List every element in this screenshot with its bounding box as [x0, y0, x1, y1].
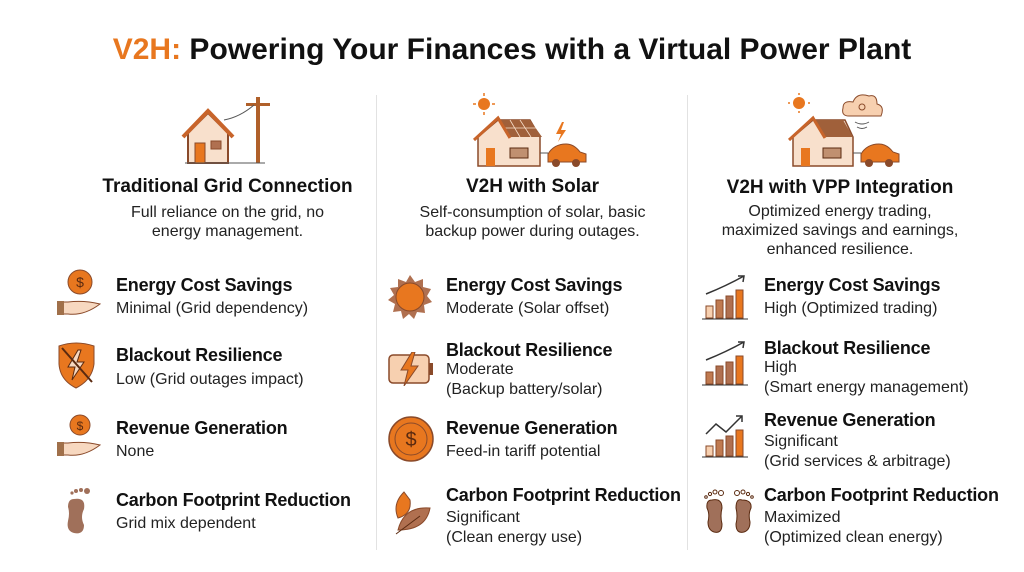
item: cost savings col2: Moderate (Solar offset) [446, 300, 609, 317]
item: carbon col3: Carbon Footprint Reduction [764, 485, 999, 505]
item: carbon col2: Carbon Footprint Reduction [446, 485, 681, 505]
item: carbon col1: Grid mix dependent [116, 515, 256, 532]
item: blackout col3: (Smart energy management) [764, 379, 969, 396]
description: enhanced resilience. [767, 241, 913, 258]
description [131, 204, 324, 240]
item: cost savings col3: Energy Cost Savings [764, 275, 940, 295]
panel: traditional grid [102, 97, 353, 240]
item: carbon col2 [396, 485, 681, 546]
item: revenue col1 [57, 414, 287, 460]
item: blackout col2: Moderate [446, 361, 514, 378]
item: blackout col2: (Backup battery/solar) [446, 381, 603, 398]
item: blackout col3 [702, 338, 969, 396]
item: blackout col2: Blackout Resilience [446, 340, 612, 360]
description [722, 203, 958, 258]
item: carbon col2: Significant [446, 509, 520, 526]
item: cost savings col1: Energy Cost Savings [116, 275, 292, 295]
item: carbon col2: (Clean energy use) [446, 529, 582, 546]
item: cost savings col1: $ [76, 274, 84, 290]
item: revenue col2: $ [405, 429, 417, 451]
item: revenue col2: Feed-in tariff potential [446, 443, 600, 460]
title: V2H: Powering Your Finances with a Virtual Power Plant [113, 33, 911, 66]
item: carbon col3: Maximized [764, 509, 840, 526]
item: cost savings col1: Minimal (Grid dependency) [116, 300, 308, 317]
item: revenue col3 [702, 410, 951, 470]
item: blackout col1 [58, 342, 304, 388]
item: blackout col3: High [764, 359, 797, 376]
item: carbon col1 [68, 488, 351, 534]
description: maximized savings and earnings, [722, 222, 958, 239]
item: revenue col3: (Grid services & arbitrage) [764, 453, 951, 470]
item: revenue col2: Revenue Generation [446, 418, 617, 438]
item: blackout col2 [388, 340, 612, 398]
description: Self-consumption of solar, basic [420, 204, 645, 221]
item: cost savings col2 [388, 275, 622, 319]
icon: house with pole [182, 97, 270, 164]
item: blackout col3: Blackout Resilience [764, 338, 930, 358]
icon: house with car and cloud [788, 93, 900, 167]
item: revenue col3: Significant [764, 433, 838, 450]
item: revenue col3: Revenue Generation [764, 410, 935, 430]
description: energy management. [152, 223, 303, 240]
heading: V2H with VPP Integration [727, 177, 953, 198]
description: backup power during outages. [425, 223, 640, 240]
item: carbon col3: (Optimized clean energy) [764, 529, 943, 546]
item: carbon col1: Carbon Footprint Reduction [116, 490, 351, 510]
heading: Traditional Grid Connection [102, 176, 353, 197]
heading: V2H with Solar [466, 176, 599, 197]
item: revenue col1: $ [77, 419, 84, 433]
description: Full reliance on the grid, no [131, 204, 324, 221]
item: cost savings col3 [702, 275, 940, 320]
item: blackout col1: Blackout Resilience [116, 345, 282, 365]
item: revenue col1: None [116, 443, 154, 460]
icon: solar house with car [473, 93, 586, 167]
item: cost savings col2: Energy Cost Savings [446, 275, 622, 295]
item: blackout col1: Low (Grid outages impact) [116, 371, 304, 388]
panel: V2H with VPP [722, 93, 958, 258]
item: revenue col2 [388, 416, 617, 462]
item: cost savings col3: High (Optimized trading) [764, 300, 937, 317]
description [420, 204, 645, 240]
item: carbon col3 [704, 485, 999, 546]
item: cost savings col1 [57, 270, 308, 317]
item: revenue col1: Revenue Generation [116, 418, 287, 438]
description: Optimized energy trading, [748, 203, 932, 220]
panel: V2H with solar [420, 93, 645, 240]
